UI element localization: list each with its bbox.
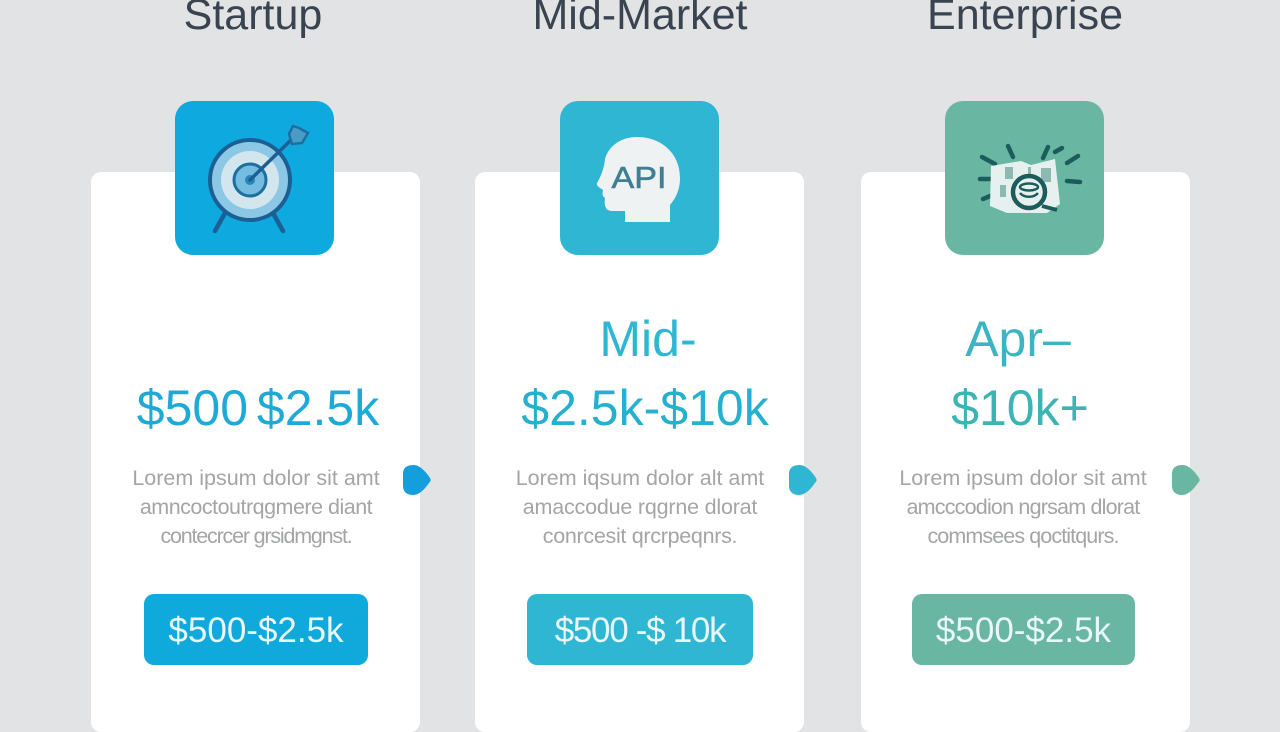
connector knob: Startup [403,465,431,495]
text block: Mid-Market description: amaccodue rqgrne dlorat [523,495,757,519]
button: Startup price [144,594,368,665]
button: Enterprise price [912,594,1135,665]
text block: Mid-Market description: conrcesit qrcrpeqnrs. [543,524,737,548]
button: Enterprise price: $500-$2.5k [936,611,1111,650]
icon: head with API label: API [612,160,666,195]
connector knob: Mid-Market [789,465,817,495]
connector knob: Enterprise [1172,465,1200,495]
label: Mid-: Mid- [599,311,697,367]
button: Startup price: $500-$2.5k [168,611,344,650]
button: Mid-Market price: $500 -$ 10k [555,611,725,650]
text block: Enterprise description: commsees qoctitqurs. [927,524,1119,548]
text block: Mid-Market description [516,466,764,548]
panel: Mid-Market card [475,172,804,732]
label: Apr-: Apr– [965,311,1071,367]
icon: head with API label [560,101,719,255]
panel: Enterprise card [861,172,1190,732]
price: Enterprise range: $10k+ [951,380,1089,436]
panel: Startup card [91,172,420,732]
text block: Enterprise description [899,466,1147,548]
button: Mid-Market price [527,594,753,665]
price: Mid-Market range: $2.5k-$10k [521,380,769,436]
icon: target with arrow [175,101,334,255]
icon: map with database magnifier [945,101,1104,255]
text block: Enterprise description: Lorem ipsum dolor sit amt [899,466,1147,490]
text block: Startup description [132,466,380,548]
price: Startup range: $500 $2.5k [137,380,379,436]
text block: Startup description: contecrcer grsidmgnst. [160,524,352,548]
text block: Startup description: amncoctoutrqgmere diant [140,495,372,519]
text block: Enterprise description: amcccodion ngrsam dlorat [907,495,1139,519]
text block: Mid-Market description: Lorem iqsum dolor alt amt [516,466,764,490]
text block: Startup description: Lorem ipsum dolor sit amt [132,466,380,490]
